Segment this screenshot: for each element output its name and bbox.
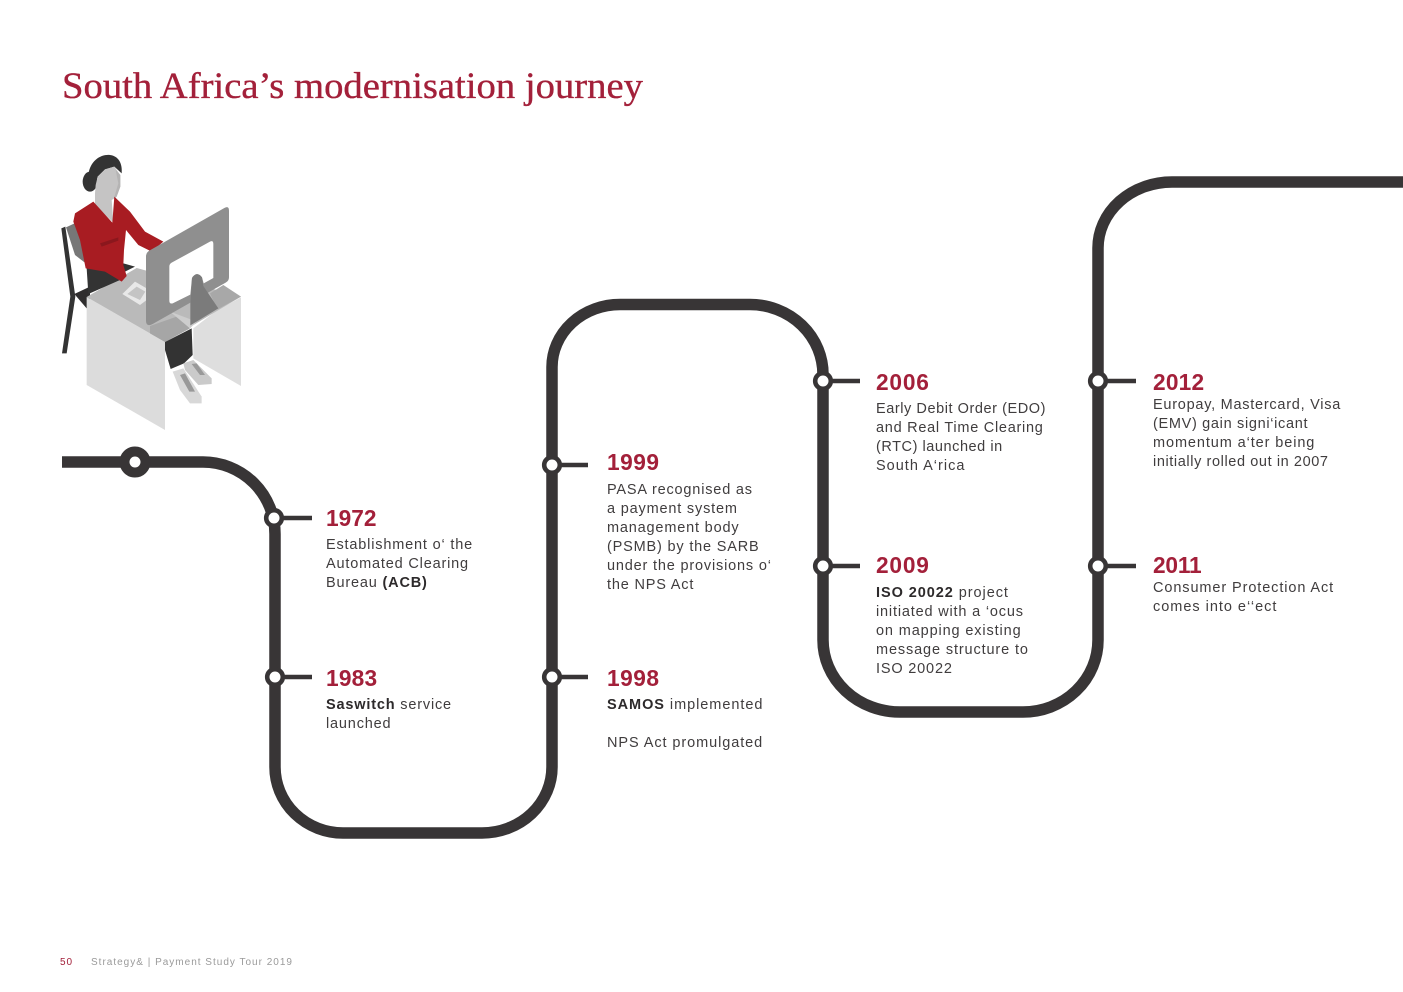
milestone 2009: ISO 20022 project — [876, 585, 1009, 601]
milestone 2009: on mapping existing — [876, 623, 1022, 639]
milestone 2009 — [815, 552, 1029, 677]
milestone 1999: (PSMB) by the SARB — [607, 539, 760, 555]
milestone 1999: 1999 — [607, 449, 659, 475]
milestone 1972: Bureau (ACB) — [326, 575, 428, 591]
start marker — [124, 452, 146, 472]
milestone 1998: SAMOS implemented — [607, 697, 763, 713]
milestone 1983: launched — [326, 716, 391, 732]
milestone 2006: South A‘rica — [876, 458, 965, 474]
milestone 1983: 1983 — [326, 665, 377, 691]
woman upper body — [73, 155, 163, 294]
milestone 1998: NPS Act promulgated — [607, 735, 763, 751]
desk top — [87, 268, 241, 342]
milestone 1999: a payment system — [607, 501, 738, 517]
chair — [61, 220, 90, 353]
timeline track — [62, 182, 1403, 833]
milestone 2011 — [1090, 552, 1334, 615]
monitor — [146, 207, 229, 325]
milestone 1983 — [267, 665, 452, 732]
milestone 1998 — [544, 665, 763, 751]
milestone 1999: management body — [607, 520, 739, 536]
back shoe — [183, 360, 212, 385]
milestone 2006: (RTC) launched in — [876, 439, 1003, 455]
milestone 2012: 2012 — [1153, 369, 1204, 395]
title: South Africa’s modernisation journey — [62, 66, 643, 107]
shirt — [73, 197, 163, 282]
milestone 2006 — [815, 369, 1046, 474]
left desk panel — [87, 297, 165, 430]
face and neck — [95, 167, 120, 223]
milestone 2012 — [1090, 369, 1341, 470]
milestone 2012: Europay, Mastercard, Visa — [1153, 397, 1341, 413]
milestone 1972: Automated Clearing — [326, 556, 469, 572]
milestone 1999: the NPS Act — [607, 577, 694, 593]
milestone 1999 — [544, 449, 772, 593]
keyboard — [122, 282, 147, 305]
milestone 1999: PASA recognised as — [607, 482, 753, 498]
milestone 2006: and Real Time Clearing — [876, 420, 1044, 436]
milestone 1983: Saswitch service — [326, 697, 452, 713]
milestone 2006: Early Debit Order (EDO) — [876, 401, 1046, 417]
milestone 1972: Establishment o‘ the — [326, 537, 473, 553]
illustration: woman at desk — [61, 155, 241, 430]
milestone 2012: momentum a‘ter being — [1153, 435, 1315, 451]
milestone 1972 — [266, 505, 473, 591]
milestone 2011: comes into e‘‘ect — [1153, 599, 1277, 615]
right desk panel — [193, 297, 241, 386]
front shoe — [173, 368, 202, 403]
milestone 2009: message structure to — [876, 642, 1029, 658]
hair — [88, 155, 122, 185]
milestone 2009: 2009 — [876, 552, 930, 578]
desk and legs — [87, 268, 241, 430]
footer — [60, 957, 293, 968]
milestone 2006: 2006 — [876, 369, 930, 395]
milestone 2009: initiated with a ‘ocus — [876, 604, 1024, 620]
milestone 1998: 1998 — [607, 665, 659, 691]
bun — [83, 172, 97, 192]
milestone 2011: 2011 — [1153, 552, 1201, 578]
milestone 2012: (EMV) gain signi‘icant — [1153, 416, 1308, 432]
trousers — [165, 328, 193, 369]
milestone 2012: initially rolled out in 2007 — [1153, 454, 1329, 470]
milestone 2011: Consumer Protection Act — [1153, 580, 1334, 596]
milestone 2009: ISO 20022 — [876, 661, 953, 677]
milestone 1999: under the provisions o‘ — [607, 558, 772, 574]
footer text: Strategy& | Payment Study Tour 2019 — [91, 957, 293, 968]
milestone 1972: 1972 — [326, 505, 376, 531]
pants — [87, 263, 135, 294]
page number: 50 — [60, 957, 73, 968]
